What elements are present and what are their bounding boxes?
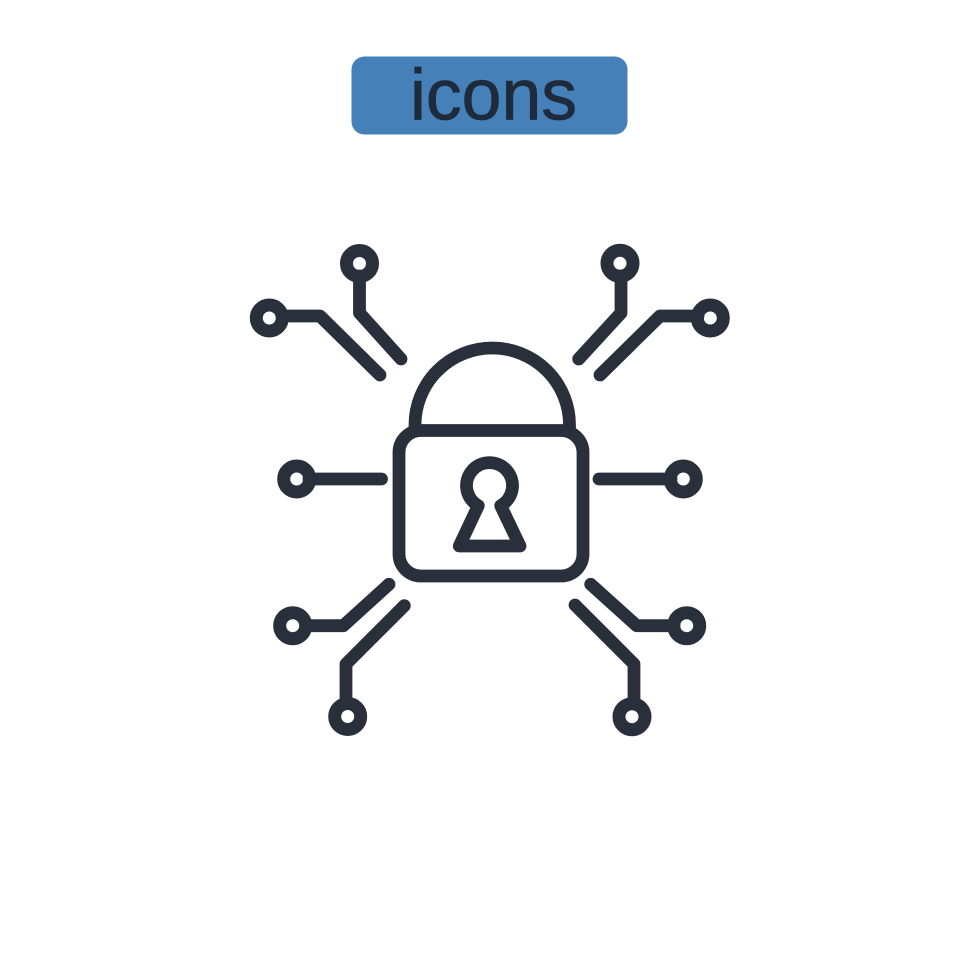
circuit trace: upper right top [579,250,633,359]
heading badge: icons [352,56,628,136]
icon: circuit padlock [256,250,723,730]
padlock body [399,430,583,576]
padlock shackle [415,348,570,430]
circuit trace: middle left [284,466,382,492]
heading badge: icons: icons [410,56,577,136]
circuit trace: middle right [599,466,696,492]
circuit trace: lower right outer [591,584,700,639]
circuit trace: lower left outer [280,584,389,639]
keyhole [459,463,520,546]
circuit trace: upper left outer [256,305,380,375]
circuit trace: lower left bottom [335,606,404,730]
circuit trace: upper right outer [600,305,723,375]
circuit trace: upper left top [346,250,401,359]
circuit trace: lower right bottom [575,605,645,730]
